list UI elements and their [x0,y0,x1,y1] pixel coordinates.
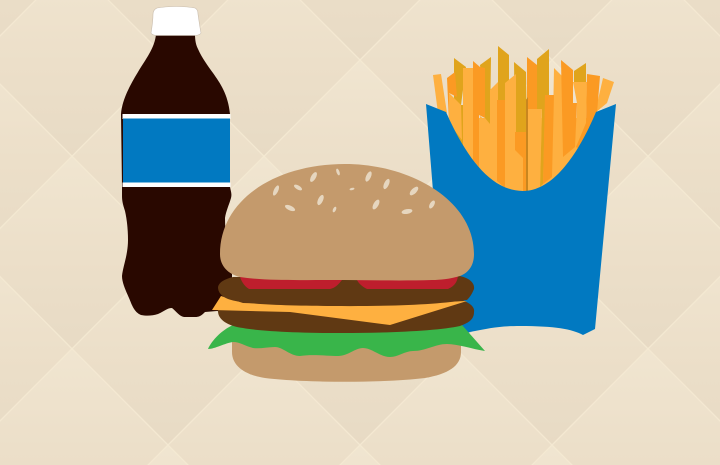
bottle body [121,34,232,317]
tomato slices [239,274,458,289]
bottom bun [232,338,461,382]
lettuce [208,325,485,357]
hamburger [208,164,485,382]
cheese slice [212,296,467,325]
soda bottle [121,6,232,317]
bottle cap [151,6,201,36]
upper patty [218,275,474,306]
fries in blue carton [426,46,616,340]
blue carton [426,104,616,340]
bottle label [122,114,230,187]
lower patty [218,300,474,333]
top bun [220,164,474,280]
sesame seeds [272,168,436,215]
fries [433,46,614,191]
